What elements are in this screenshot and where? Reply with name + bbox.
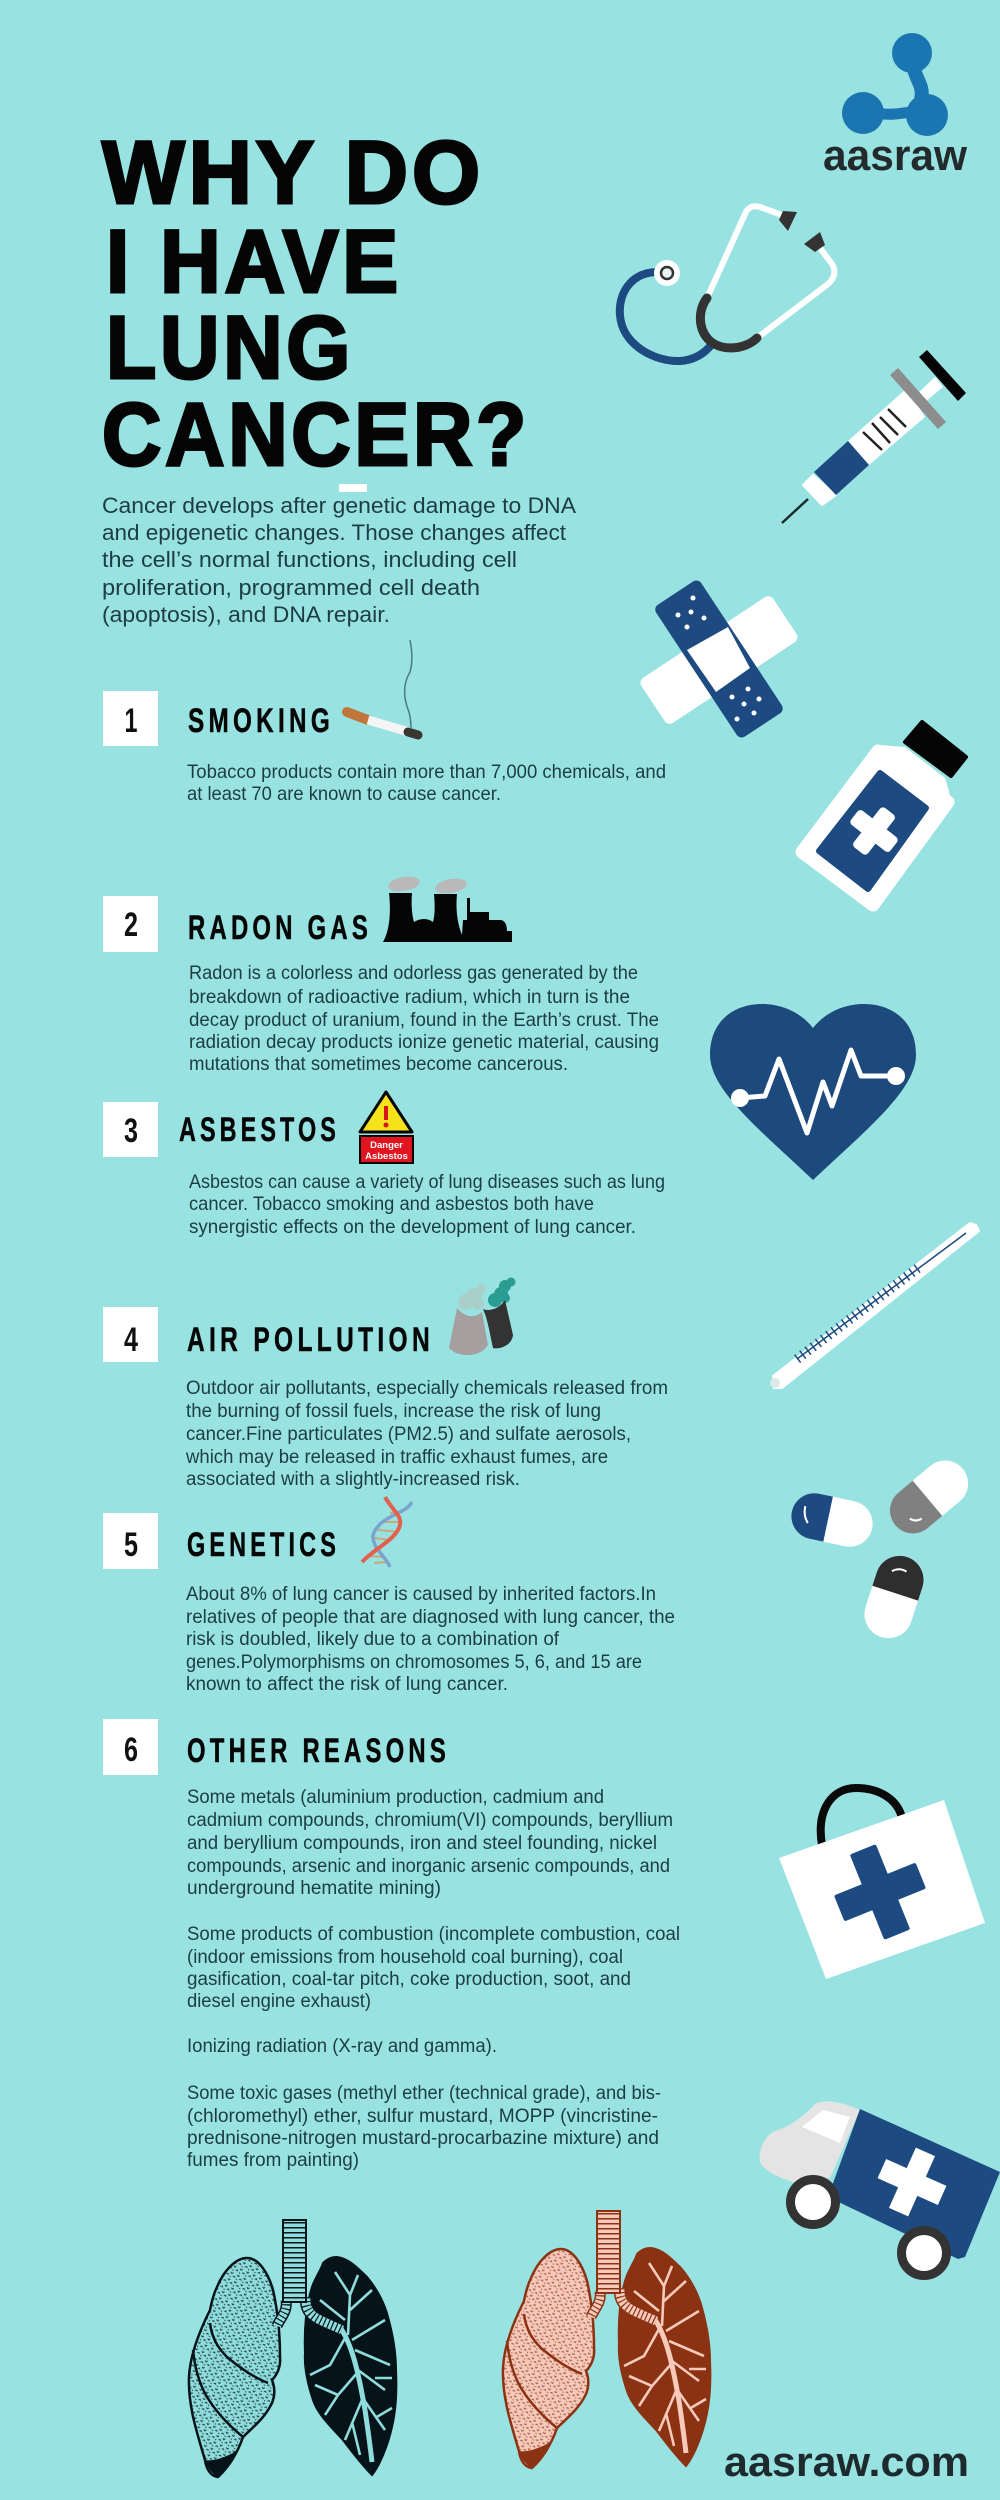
body text: genetics: risk is doubled, likely due to a combination of	[186, 1629, 560, 1650]
icon: syringe	[782, 350, 966, 523]
icon: stethoscope	[620, 206, 834, 361]
section 5: genetics	[103, 1497, 675, 1695]
body text: asbestos	[189, 1172, 665, 1238]
body text: smoking	[187, 762, 666, 805]
number box 2	[103, 896, 158, 952]
body text: radon gas	[189, 963, 659, 1075]
body text: combustion: Some products of combustion (incomplete combustion, coal	[187, 1924, 680, 1945]
body text: air pollution: Outdoor air pollutants, especially chemicals released from	[186, 1378, 668, 1399]
section 1: smoking	[103, 640, 666, 805]
body text: metals: cadmium compounds, chromium(VI) compounds, beryllium	[187, 1810, 673, 1831]
pill: blue and white	[787, 1489, 877, 1551]
icon: medicine bottle	[802, 722, 966, 905]
body text: radon gas: radiation decay products ionize genetic material, causing	[189, 1032, 659, 1053]
intro text: the cell’s normal functions, including cell	[102, 547, 517, 572]
body text: radon gas: Radon is a colorless and odorless gas generated by the	[189, 963, 638, 984]
number box 1: 1	[124, 702, 138, 740]
body text: smoking: Tobacco products contain more than 7,000 chemicals, and	[187, 762, 666, 783]
body text: radon gas: mutations that sometimes become cancerous.	[189, 1054, 568, 1075]
body text: toxic gases	[187, 2083, 661, 2171]
number box 4	[103, 1307, 158, 1362]
body text: air pollution: which may be released in traffic exhaust fumes, are	[185, 1447, 608, 1468]
illustration: smoker's lungs (black)	[189, 2220, 396, 2477]
logo: aasraw	[823, 33, 968, 180]
icon: heart with pulse	[710, 1004, 916, 1180]
heading: other reasons: OTHER REASONS	[187, 1732, 450, 1770]
body text: toxic gases: Some toxic gases (methyl ether (technical grade), and bis-	[187, 2083, 661, 2104]
body text: genetics: genes.Polymorphisms on chromosomes 5, 6, and 15 are	[186, 1652, 642, 1673]
number box 4: 4	[124, 1321, 138, 1359]
body text: metals: Some metals (aluminium production, cadmium and	[187, 1787, 604, 1808]
body text: toxic gases: fumes from painting)	[187, 2150, 359, 2171]
number box 5	[103, 1513, 158, 1569]
body text: asbestos: cancer. Tobacco smoking and asbestos both have	[189, 1194, 594, 1215]
title: CANCER?	[102, 384, 530, 484]
icon: bandage	[638, 578, 800, 740]
number box 3	[103, 1102, 158, 1157]
section 2: radon gas	[103, 874, 659, 1075]
body text: toxic gases: (chloromethyl) ether, sulfur mustard, MOPP (vincristine-	[187, 2106, 658, 2127]
number box 3: 3	[124, 1112, 138, 1150]
icon: pollution stacks	[449, 1278, 516, 1355]
icon: cigarette	[347, 640, 418, 735]
title: LUNG	[106, 297, 354, 397]
icon: first aid case	[779, 1788, 985, 1979]
body text: genetics: known to affect the risk of lung cancer.	[186, 1674, 508, 1695]
heading: smoking: SMOKING	[188, 702, 334, 740]
number box 1	[103, 691, 158, 746]
body text: asbestos: synergistic effects on the development of lung cancer.	[189, 1217, 636, 1238]
body text: air pollution	[185, 1378, 668, 1490]
title	[102, 122, 530, 484]
section 3: asbestos	[103, 1092, 665, 1238]
title: I HAVE	[106, 211, 402, 311]
heading: genetics: GENETICS	[187, 1526, 340, 1564]
heading: asbestos: ASBESTOS	[179, 1111, 340, 1149]
body text: radon gas: breakdown of radioactive radium, which in turn is the	[189, 987, 630, 1008]
body text: metals: compounds, arsenic and inorganic arsenic compounds, and	[187, 1856, 670, 1877]
section 4: air pollution	[103, 1278, 668, 1490]
body text: combustion	[187, 1924, 680, 2012]
body text: radon gas: decay product of uranium, found in the Earth’s crust. The	[189, 1010, 659, 1031]
intro text: and epigenetic changes. Those changes affect	[102, 520, 566, 545]
body text: air pollution: the burning of fossil fuels, increase the risk of lung	[186, 1401, 601, 1422]
heading: air pollution: AIR POLLUTION	[187, 1321, 434, 1359]
body text: combustion: (indoor emissions from household coal burning), coal	[187, 1947, 623, 1968]
body text: radiation: Ionizing radiation (X-ray and gamma).	[187, 2036, 497, 2057]
body text: toxic gases: prednisone-nitrogen mustard-procarbazine mixture) and	[187, 2128, 659, 2149]
icon: danger asbestos sign	[360, 1092, 413, 1163]
icon: ambulance	[760, 2101, 1000, 2276]
icon: factory	[383, 874, 512, 942]
intro text: proliferation, programmed cell death	[102, 575, 480, 600]
body text: smoking: at least 70 are known to cause cancer.	[187, 784, 501, 805]
icon: logo molecule	[842, 33, 948, 136]
number box 2: 2	[124, 906, 138, 944]
title: WHY DO	[102, 122, 484, 222]
body text: metals: underground hematite mining)	[187, 1878, 441, 1899]
body text: metals	[187, 1787, 673, 1899]
pill: black and white	[858, 1550, 930, 1644]
icon: danger asbestos sign: Asbestos	[365, 1151, 408, 1162]
body text: combustion: diesel engine exhaust)	[187, 1991, 371, 2012]
logo wordmark: aasraw	[823, 131, 968, 180]
body text: asbestos: Asbestos can cause a variety of lung diseases such as lung	[189, 1172, 665, 1193]
intro text: Cancer develops after genetic damage to DNA	[102, 493, 576, 518]
body text: genetics: relatives of people that are diagnosed with lung cancer, the	[186, 1607, 675, 1628]
body text: combustion: gasification, coal-tar pitch, coke production, soot, and	[187, 1969, 631, 1990]
website url: aasraw.com	[724, 2438, 969, 2485]
pill: grey and white	[881, 1451, 977, 1543]
title accent dash	[339, 484, 367, 492]
section 6: other reasons	[103, 1719, 680, 2171]
icon: dna helix	[362, 1497, 412, 1567]
icon: danger asbestos sign: Danger	[370, 1140, 403, 1151]
body text: genetics	[186, 1584, 675, 1695]
icon: thermometer	[770, 1223, 979, 1388]
illustration: lungs (red)	[503, 2211, 710, 2468]
body text: air pollution: associated with a slightly-increased risk.	[186, 1469, 520, 1490]
number box 6	[103, 1719, 158, 1775]
body text: air pollution: cancer.Fine particulates (PM2.5) and sulfate aerosols,	[186, 1424, 631, 1445]
number box 6: 6	[124, 1731, 138, 1769]
body text: metals: and beryllium compounds, iron and steel founding, nickel	[187, 1833, 657, 1854]
intro text	[102, 493, 576, 627]
icon: pills	[787, 1451, 977, 1644]
intro text: (apoptosis), and DNA repair.	[102, 602, 390, 627]
number box 5: 5	[124, 1526, 138, 1564]
body text: genetics: About 8% of lung cancer is caused by inherited factors.In	[186, 1584, 656, 1605]
heading: radon gas: RADON GAS	[188, 909, 372, 947]
